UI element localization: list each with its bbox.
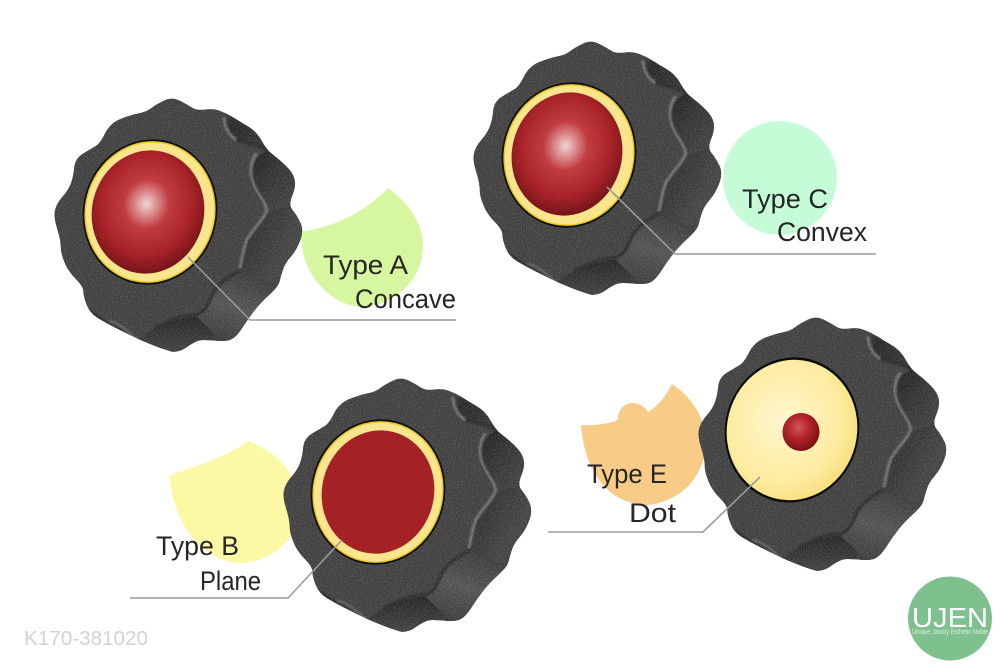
- blob: type C backdrop: [723, 121, 837, 235]
- label: type C: [742, 184, 867, 247]
- label: type E: Dot: [629, 498, 677, 528]
- label: type C: Convex: [777, 217, 867, 247]
- label: type E: [587, 459, 677, 528]
- knob: type C: [473, 42, 729, 300]
- leader line: type A: [188, 257, 456, 320]
- icon: dot button: [709, 343, 875, 517]
- knob: type A: [54, 99, 310, 357]
- label: type B: [156, 531, 261, 596]
- label: type B: Plane: [200, 566, 261, 596]
- logo: UJEN: [908, 576, 992, 660]
- product code: K170-381020: [24, 628, 148, 650]
- icon: concave red button: [67, 125, 233, 299]
- icon: convex red button: [486, 68, 652, 242]
- blob: type B backdrop: [169, 441, 295, 563]
- leader line: type B: [130, 540, 342, 598]
- label: type C: Type C: [742, 184, 828, 214]
- label: type A: Type A: [323, 250, 408, 280]
- knob: type E: [698, 318, 954, 576]
- knob: type B: [283, 379, 539, 637]
- label: type E: Type E: [587, 459, 667, 489]
- label: type A: Concave: [355, 284, 456, 314]
- blob: type E backdrop: [581, 384, 706, 505]
- leader line: type E: [548, 477, 760, 532]
- label: type A: [323, 250, 456, 314]
- logo: UJEN: UJEN: [912, 602, 988, 633]
- blob: type A backdrop: [300, 188, 423, 307]
- label: type B: Type B: [156, 531, 239, 561]
- icon: plane red button: [295, 405, 461, 579]
- leader line: type C: [607, 187, 876, 254]
